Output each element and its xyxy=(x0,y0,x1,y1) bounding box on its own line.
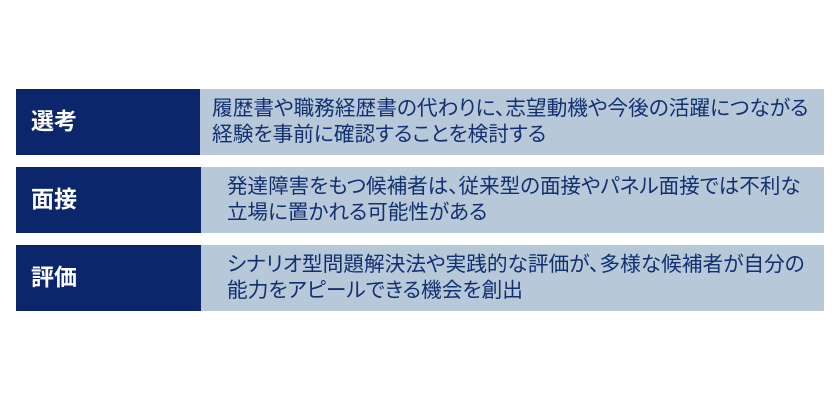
text: 面接 description: 立場に置かれる可能性がある xyxy=(227,201,487,224)
text: 評価 description: シナリオ型問題解決法や実践的な評価が、多様な候補者が自分の xyxy=(227,253,805,276)
panel: 面接 row xyxy=(16,167,824,233)
heading: 選考 xyxy=(16,89,200,155)
text: 評価 description: 能力をアピールできる機会を創出 xyxy=(227,279,523,302)
heading: 面接 xyxy=(16,167,201,233)
heading: 評価: 評価 xyxy=(31,264,77,290)
panel: 選考 row xyxy=(16,89,824,155)
text: 評価 description xyxy=(227,253,805,302)
text: 選考 description: 履歴書や職務経歴書の代わりに、志望動機や今後の活躍につながる xyxy=(212,97,809,120)
text: 選考 description: 経験を事前に確認することを検討する xyxy=(212,123,546,146)
text: 選考 description xyxy=(212,97,809,146)
heading: 評価 xyxy=(16,245,201,311)
heading: 面接: 面接 xyxy=(31,186,77,212)
panel: 評価 row xyxy=(16,245,824,311)
heading: 選考: 選考 xyxy=(31,108,77,134)
text: 面接 description: 発達障害をもつ候補者は、従来型の面接やパネル面接では不利な xyxy=(227,175,801,198)
text: 面接 description xyxy=(227,175,801,224)
